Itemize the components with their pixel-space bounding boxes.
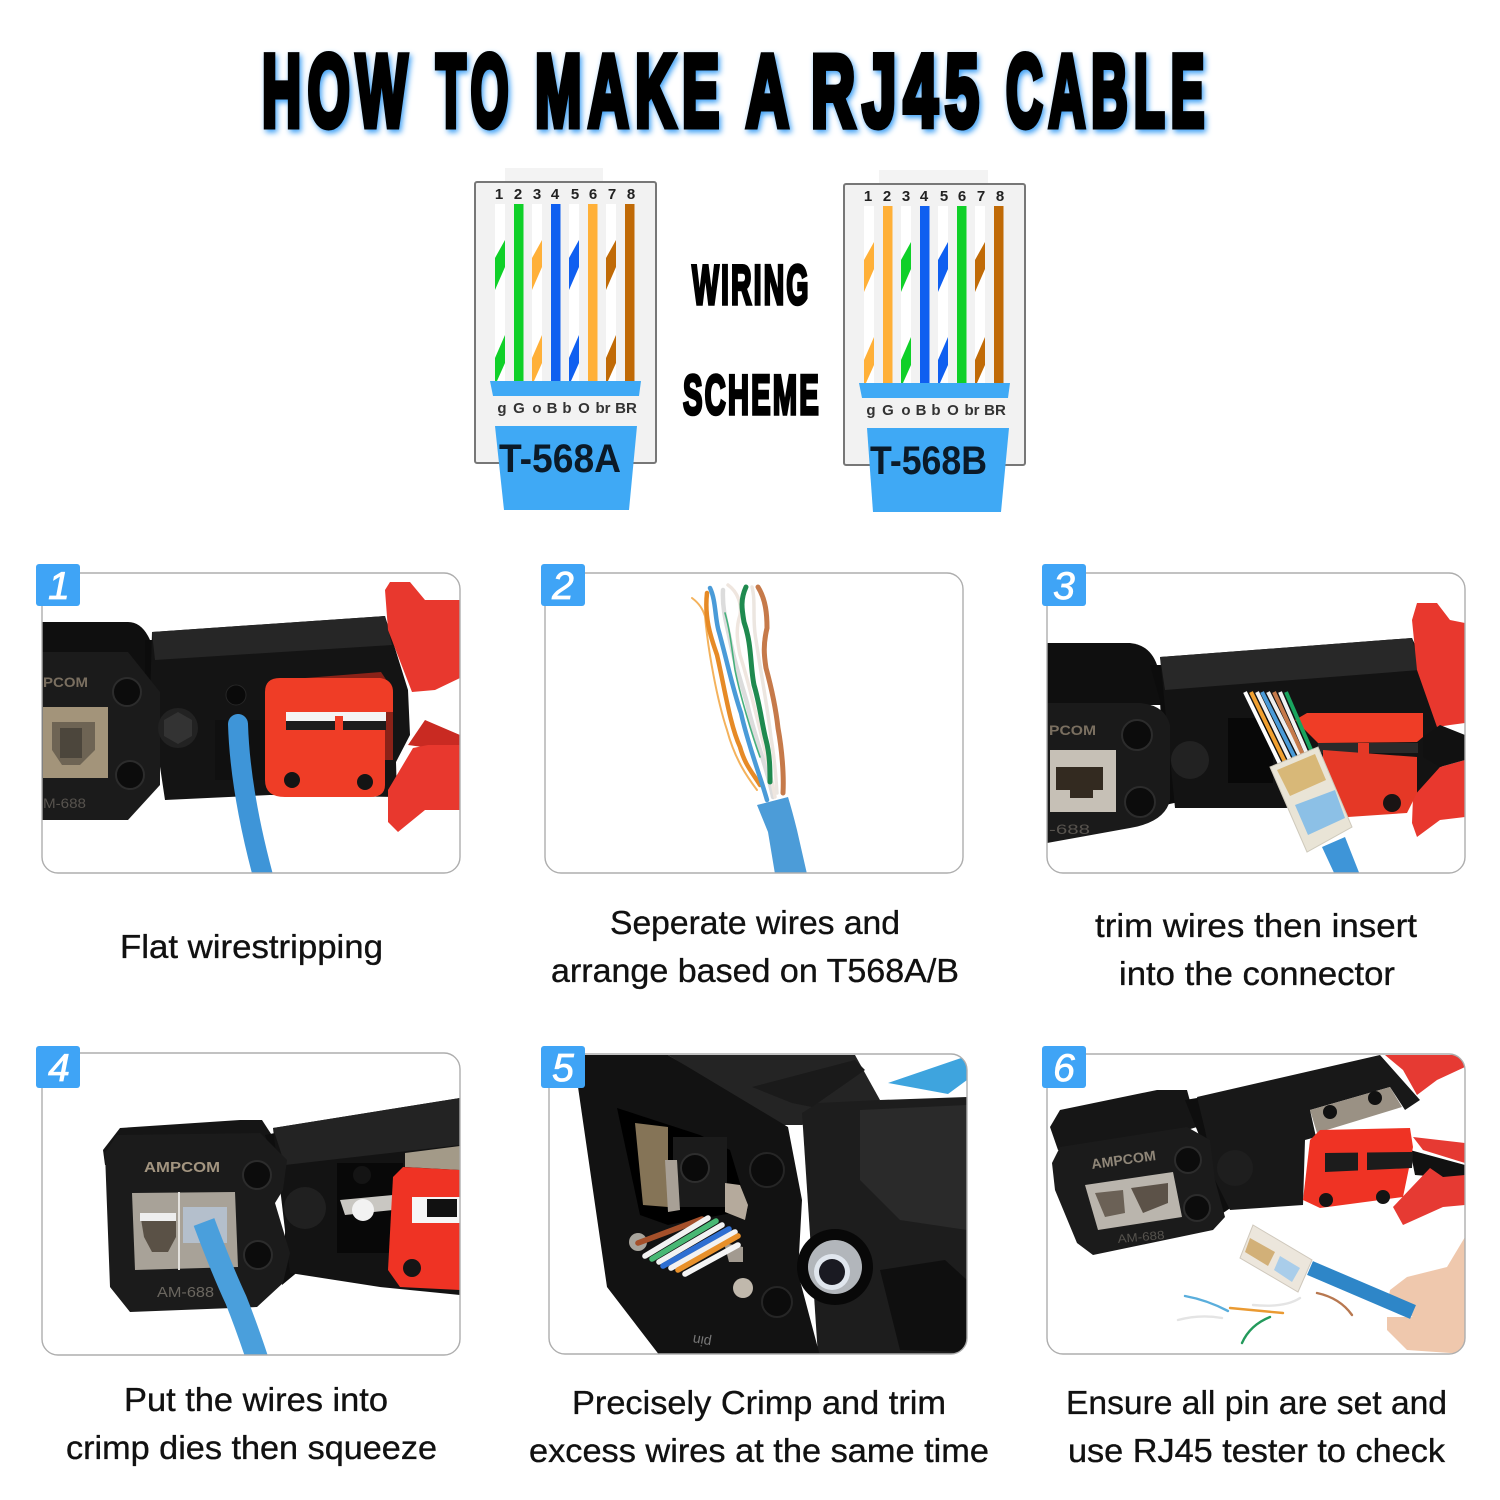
panel: step 1: M-688 [43, 795, 86, 811]
panel: step 6 [1042, 1046, 1465, 1354]
wiring diagram: T-568A: 5 [571, 186, 579, 203]
wiring diagram: T-568B: 6 [958, 188, 966, 205]
panel: step 4: AM-688 [157, 1284, 214, 1301]
wiring diagram: T-568A: 7 [608, 186, 616, 203]
title: MAKE [535, 35, 726, 148]
badge 2: 2 [551, 565, 574, 608]
title: RJ45 [811, 34, 986, 148]
wiring diagram: T-568A: 4 [551, 186, 560, 203]
wiring diagram: T-568B: 8 [996, 188, 1004, 205]
wiring diagram: T-568A: O [578, 400, 590, 417]
wiring diagram: T-568A: 8 [627, 186, 635, 203]
badge 4: 4 [48, 1047, 70, 1090]
badge 4 [36, 1046, 80, 1090]
wiring diagram: T-568B: g [866, 402, 876, 419]
badge 3: 3 [1053, 565, 1075, 608]
panel: step 5: pin [691, 1332, 713, 1351]
badge 1: 1 [48, 565, 70, 608]
caption 2: arrange based on T568A/B [551, 952, 959, 989]
wiring diagram: T-568A: 1 [495, 186, 503, 203]
panel: step 3 [1042, 564, 1465, 875]
caption 3: into the connector [1119, 955, 1395, 992]
caption 6: Ensure all pin are set and [1066, 1384, 1447, 1421]
badge 6 [1042, 1046, 1086, 1090]
panel: step 3: PCOM [1049, 722, 1096, 738]
heading: scheme: SCHEME [683, 365, 821, 427]
badge 1 [36, 564, 80, 608]
title: A [746, 34, 796, 148]
caption 5: excess wires at the same time [529, 1432, 989, 1469]
wiring diagram: T-568B [844, 170, 1025, 512]
caption 4 [66, 1381, 437, 1466]
wiring diagram: T-568B: 7 [977, 188, 985, 205]
caption 6 [1066, 1384, 1447, 1469]
wiring diagram: T-568B: b [931, 402, 941, 419]
badge 3 [1042, 564, 1086, 608]
title: HOW [262, 35, 414, 148]
wiring diagram: T-568A: o [532, 400, 542, 417]
badge 5 [541, 1046, 585, 1090]
panel: step 2 [541, 564, 963, 874]
wiring diagram: T-568A: 3 [533, 186, 541, 203]
caption 6: use RJ45 tester to check [1068, 1432, 1446, 1469]
wiring diagram: T-568A: br [596, 400, 611, 417]
wiring diagram: T-568B: o [901, 402, 911, 419]
wiring diagram: T-568A: B [547, 400, 558, 417]
wiring diagram: T-568B: 3 [902, 188, 910, 205]
caption 1: Flat wirestripping [120, 928, 383, 965]
wiring diagram: T-568A: g [497, 400, 507, 417]
title: TO [436, 34, 514, 148]
panel: step 1 [36, 564, 460, 876]
wiring diagram: T-568B: 1 [864, 188, 872, 205]
wiring diagram: T-568B: BR [984, 402, 1006, 419]
heading: wiring: WIRING [692, 255, 811, 317]
panel: step 1: PCOM [43, 674, 88, 690]
caption 5: Precisely Crimp and trim [572, 1384, 946, 1421]
badge 2 [541, 564, 585, 608]
wiring diagram: T-568B: 5 [940, 188, 948, 205]
wiring diagram: T-568B: 2 [883, 188, 891, 205]
caption 3: trim wires then insert [1095, 907, 1417, 944]
panel: step 3: -688 [1049, 821, 1090, 837]
wiring diagram: T-568A [475, 168, 656, 510]
wiring diagram: T-568A: 6 [589, 186, 597, 203]
wiring diagram: T-568A: BR [615, 400, 637, 417]
wiring diagram: T-568A: b [562, 400, 572, 417]
badge 6: 6 [1053, 1047, 1075, 1090]
wiring diagram: T-568B: B [916, 402, 927, 419]
panel: step 4 [36, 1046, 460, 1358]
caption 3 [1095, 907, 1417, 992]
title: CABLE [1006, 35, 1210, 149]
caption 5 [529, 1384, 989, 1469]
panel: step 4: AMPCOM [144, 1159, 220, 1176]
caption 2: Seperate wires and [610, 904, 900, 941]
caption 4: crimp dies then squeeze [66, 1429, 437, 1466]
panel: step 6: AM-688 [1117, 1228, 1165, 1246]
caption 2 [551, 904, 959, 989]
wiring diagram: T-568B: T-568B [870, 439, 987, 483]
wiring diagram: T-568A: G [513, 400, 525, 417]
panel: step 5 [541, 1046, 967, 1356]
caption 4: Put the wires into [124, 1381, 388, 1418]
wiring diagram: T-568B: G [882, 402, 894, 419]
wiring diagram: T-568B: O [947, 402, 959, 419]
wiring diagram: T-568B: 4 [920, 188, 929, 205]
title [262, 34, 1210, 149]
wiring diagram: T-568B: br [964, 402, 980, 419]
badge 5: 5 [552, 1047, 574, 1090]
wiring diagram: T-568A: T-568A [499, 437, 621, 481]
wiring diagram: T-568A: 2 [514, 186, 522, 203]
panel: step 6: AMPCOM [1090, 1147, 1157, 1172]
